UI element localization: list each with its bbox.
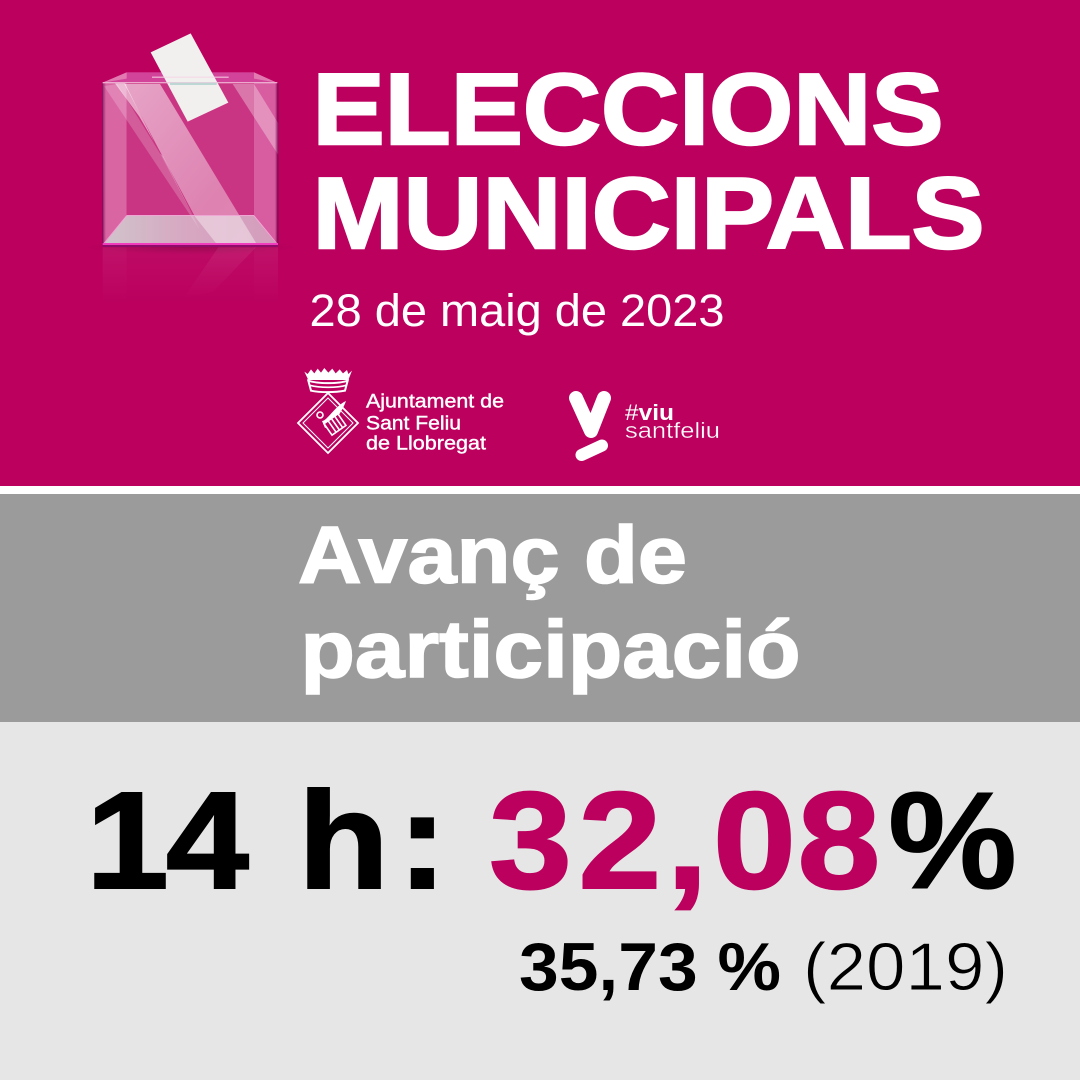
logo text: Sant Feliu xyxy=(366,412,461,434)
main statistic: 14 h 32,08%: % xyxy=(888,764,1017,918)
panel: light results area xyxy=(0,722,1080,1080)
hashtag text: #viu xyxy=(625,400,674,425)
icon: diamond shield xyxy=(298,393,358,453)
icon: glass ballot box xyxy=(87,33,294,304)
logo text xyxy=(366,390,504,454)
icon: V mark xyxy=(576,398,604,455)
title: Eleccions Municipals: ELECCIONS xyxy=(312,54,944,166)
main statistic: 14 h 32,08%: 14 h: xyxy=(86,764,447,918)
icon: municipal crown xyxy=(304,368,352,392)
comparison statistic: 2019: (2019) xyxy=(803,929,1008,1005)
hashtag text: santfeliu xyxy=(625,418,720,443)
heading: Avanç de participació: Avanç de xyxy=(298,510,687,600)
panel: magenta header xyxy=(0,0,1080,486)
date: 28 de maig de 2023 xyxy=(310,285,724,336)
heading: Avanç de participació: participació xyxy=(300,605,800,695)
logo text: Ajuntament de xyxy=(366,390,504,412)
comparison statistic: 2019: 35,73 % xyxy=(519,929,781,1005)
main statistic: 14 h 32,08% xyxy=(86,764,1017,918)
logo: Ajuntament de Sant Feliu de Llobregat xyxy=(298,368,504,454)
logo: viu sant feliu xyxy=(576,398,720,455)
title: Eleccions Municipals xyxy=(312,54,984,270)
title: Eleccions Municipals: MUNICIPALS xyxy=(312,158,984,270)
heading: Avanç de participació xyxy=(298,510,800,695)
hashtag text xyxy=(625,400,720,443)
main statistic: 14 h 32,08%: 32,08 xyxy=(489,764,880,918)
logo text: de Llobregat xyxy=(366,432,487,454)
panel: grey heading band xyxy=(0,494,1080,722)
comparison statistic: 2019 xyxy=(519,929,1008,1005)
